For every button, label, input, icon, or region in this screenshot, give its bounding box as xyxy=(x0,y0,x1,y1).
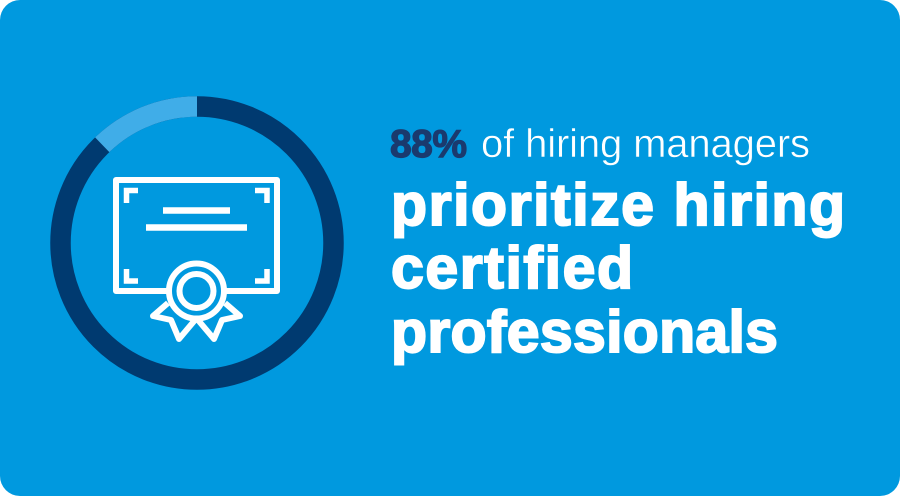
bold statement line 1: prioritize hiring xyxy=(391,172,845,238)
stat number: 88% xyxy=(390,123,467,166)
donut chart: 88 percent ring xyxy=(60,106,334,380)
stat line: of hiring managers xyxy=(481,122,810,166)
headline text xyxy=(390,122,845,365)
icon: certificate with ribbon seal xyxy=(116,180,277,339)
bold statement line 3: professionals xyxy=(391,299,778,365)
bold statement line 2: certified xyxy=(391,235,633,301)
